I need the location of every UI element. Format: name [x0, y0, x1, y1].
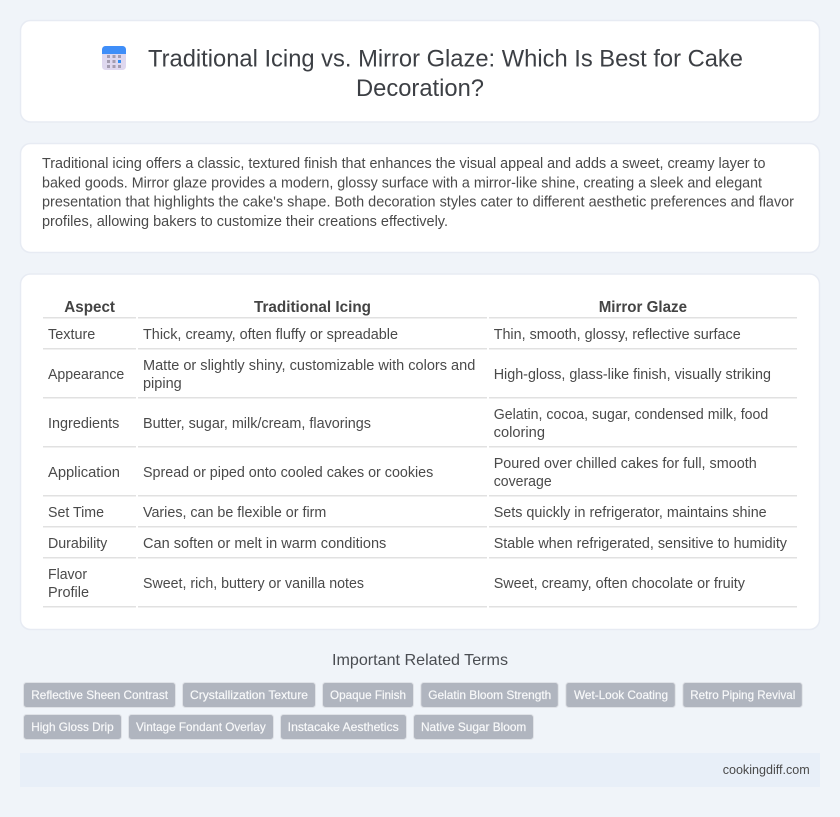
table row: ingredients: Ingredients	[48, 416, 119, 432]
table row: ingredients	[48, 407, 768, 441]
table row: texture: Texture	[48, 327, 95, 343]
tag: Crystallization Texture	[190, 688, 308, 702]
table row: texture: Thin, smooth, glossy, reflective surface	[494, 327, 741, 343]
panel: introduction	[20, 144, 820, 252]
table row: durability: Can soften or melt in warm conditions	[143, 536, 386, 552]
table row: set time: Set Time	[48, 505, 104, 521]
table row: durability: Durability	[48, 536, 108, 552]
table row: flavor profile: Sweet, creamy, often chocolate or fruity	[494, 576, 746, 592]
panel: comparison table	[20, 274, 820, 630]
intro paragraph: presentation that highlights the cake's shape. Both decoration styles cater to different aesthetic preferences and flavor	[42, 195, 794, 211]
tag: Vintage Fondant Overlay	[136, 720, 266, 734]
tag	[414, 714, 534, 740]
table header row: Mirror Glaze	[599, 299, 687, 316]
table row: ingredients: Gelatin, cocoa, sugar, condensed milk, food	[494, 407, 768, 423]
table row: appearance: Appearance	[48, 367, 124, 383]
table row: set time: Varies, can be flexible or firm	[143, 505, 326, 521]
table row: appearance: Matte or slightly shiny, customizable with colors and	[143, 358, 475, 374]
footer bar	[20, 753, 820, 787]
table header row: Aspect	[64, 299, 116, 316]
title	[148, 46, 743, 102]
tag: Opaque Finish	[330, 688, 406, 702]
tag: Gelatin Bloom Strength	[428, 688, 551, 702]
table header row	[64, 299, 687, 316]
tag: Instacake Aesthetics	[288, 720, 399, 734]
table row: texture	[48, 327, 741, 343]
title: Decoration?	[356, 75, 484, 102]
table row: appearance: High-gloss, glass-like finish, visually striking	[494, 367, 771, 383]
panel: title header	[20, 20, 820, 122]
title: Traditional Icing vs. Mirror Glaze: Which Is Best for Cake	[148, 46, 743, 72]
table row: durability	[48, 536, 788, 552]
tag: Wet-Look Coating	[574, 688, 668, 702]
tag	[24, 714, 122, 740]
table row: application: Application	[48, 465, 120, 481]
table row: durability: Stable when refrigerated, sensitive to humidity	[494, 536, 788, 552]
tag: Native Sugar Bloom	[421, 720, 526, 734]
table row: ingredients: Butter, sugar, milk/cream, flavorings	[143, 416, 371, 432]
table row: ingredients: coloring	[494, 425, 545, 441]
tag	[683, 682, 802, 708]
intro paragraph: baked goods. Mirror glaze provides a modern, glossy surface with a mirror-like shine, creating a sleek and elegant	[42, 175, 762, 191]
tag: High Gloss Drip	[31, 720, 114, 734]
tag	[322, 682, 414, 708]
tag	[421, 682, 558, 708]
tag	[24, 682, 176, 708]
table row: flavor profile: Flavor	[48, 567, 87, 583]
intro paragraph: profiles, allowing bakers to customize their creations effectively.	[42, 214, 448, 230]
table row: flavor profile	[48, 567, 746, 601]
tag	[182, 682, 316, 708]
tag	[280, 714, 406, 740]
table row: flavor profile: Profile	[48, 585, 89, 601]
table row: set time: Sets quickly in refrigerator, maintains shine	[494, 505, 767, 521]
section heading: related terms: Important Related Terms	[332, 652, 508, 669]
tag: Reflective Sheen Contrast	[31, 688, 169, 702]
table row: appearance	[48, 358, 771, 392]
table row: application: Poured over chilled cakes for full, smooth	[494, 456, 757, 472]
table row: appearance: piping	[143, 376, 182, 392]
table row: flavor profile: Sweet, rich, buttery or vanilla notes	[143, 576, 364, 592]
intro paragraph	[42, 156, 794, 230]
intro paragraph: Traditional icing offers a classic, textured finish that enhances the visual appeal and adds a sweet, creamy layer to	[42, 156, 766, 172]
footer bar: cookingdiff.com	[723, 762, 810, 777]
tag	[566, 682, 675, 708]
tag: Retro Piping Revival	[690, 688, 795, 702]
table row: texture: Thick, creamy, often fluffy or spreadable	[143, 327, 398, 343]
panel: related term tags	[24, 682, 802, 740]
table row: set time	[48, 505, 767, 521]
icon: calendar	[102, 46, 126, 70]
tag	[128, 714, 274, 740]
table row: application	[48, 456, 757, 490]
table header row: Traditional Icing	[254, 299, 371, 316]
table row: application: coverage	[494, 474, 552, 490]
table row: application: Spread or piped onto cooled cakes or cookies	[143, 465, 433, 481]
